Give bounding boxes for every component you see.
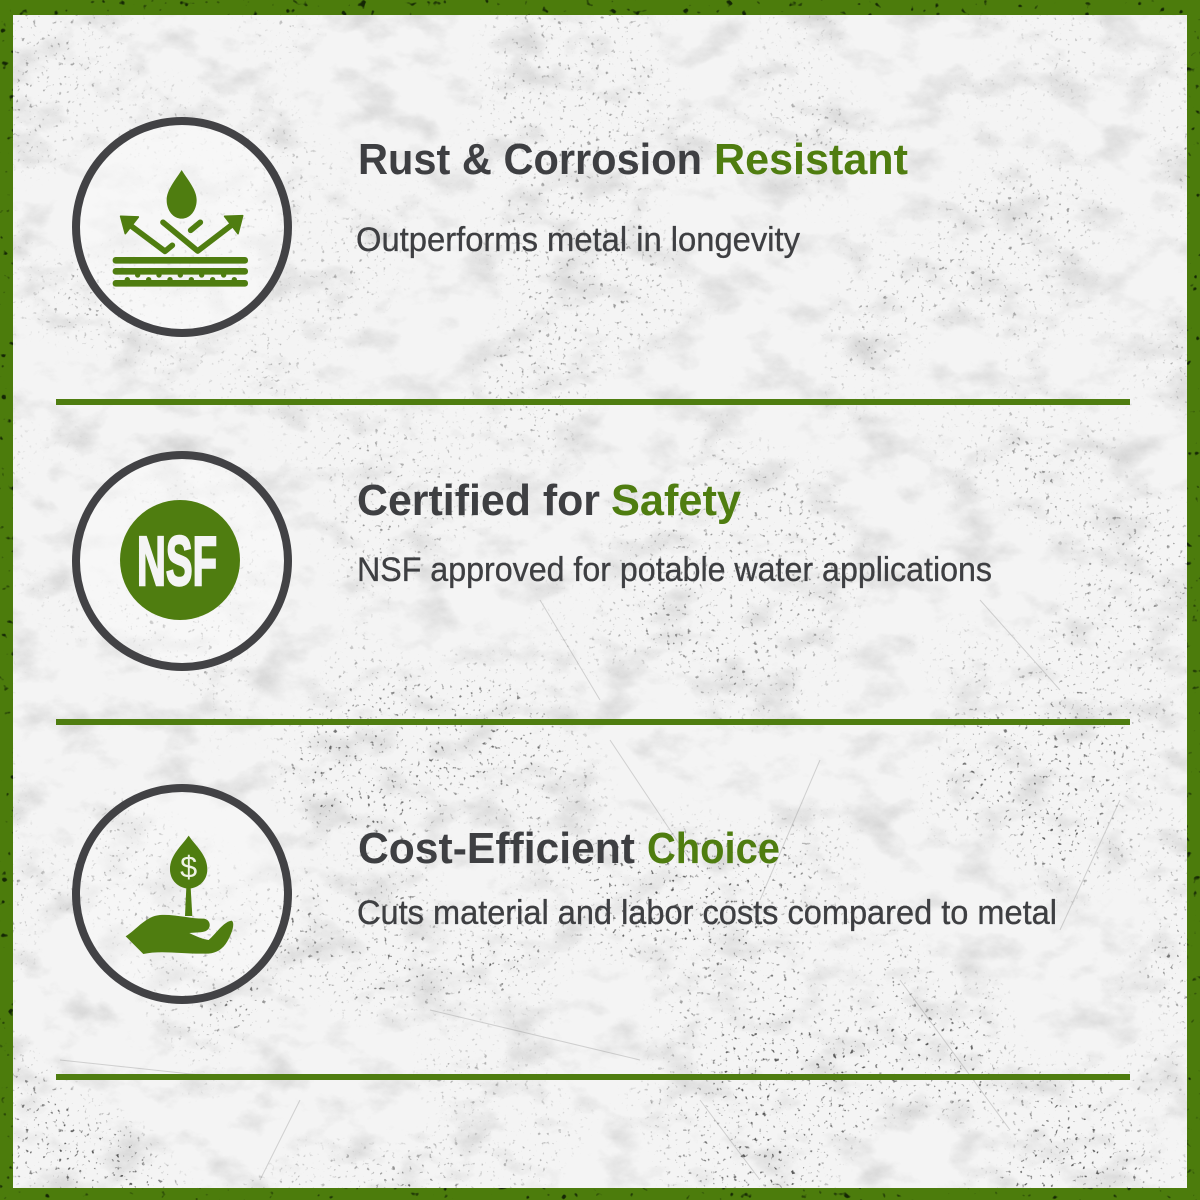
icon: NSF badge	[76, 455, 288, 667]
heading: certified for safety	[357, 476, 742, 525]
description: NSF approved: NSF approved for potable water applications	[357, 551, 992, 589]
icon: NSF badge: NSF	[137, 522, 217, 600]
heading: rust and corrosion resistant: Rust & Corrosion	[358, 135, 702, 184]
heading: certified for safety: Safety	[611, 476, 742, 525]
divider 2	[56, 719, 1130, 725]
heading: certified for safety: Certified for	[357, 476, 600, 525]
divider 1	[56, 399, 1130, 405]
row 1: rust and corrosion resistant	[76, 121, 908, 333]
heading: cost-efficient choice	[358, 824, 780, 873]
divider 3	[56, 1074, 1130, 1080]
description: cuts costs: Cuts material and labor costs compared to metal	[357, 894, 1057, 932]
icon: hand holding dollar leaf	[76, 788, 288, 1000]
heading: rust and corrosion resistant	[358, 135, 908, 184]
heading: rust and corrosion resistant: Resistant	[714, 135, 908, 184]
heading: cost-efficient choice: Choice	[647, 824, 780, 873]
description: longevity: Outperforms metal in longevity	[356, 221, 800, 259]
row 3: cost-efficient choice	[76, 788, 1057, 1000]
icon: water droplet repelled by layered surface	[76, 121, 288, 333]
icon: hand holding dollar leaf: $	[180, 850, 197, 884]
row 2: certified for safety	[76, 455, 992, 667]
heading: cost-efficient choice: Cost-Efficient	[358, 824, 635, 873]
